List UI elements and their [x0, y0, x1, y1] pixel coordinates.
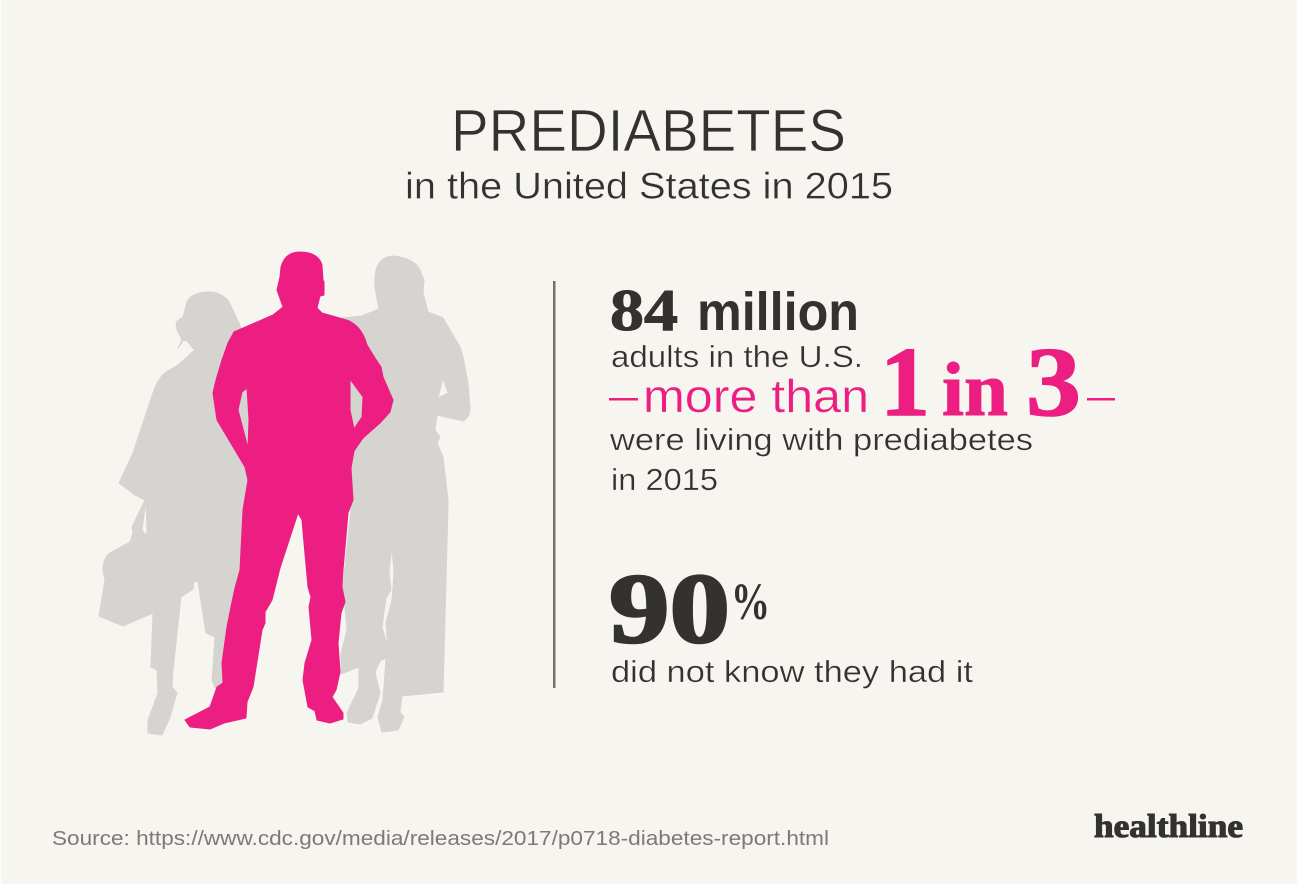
big number: 84 million	[610, 277, 859, 343]
title	[405, 98, 893, 206]
silhouette: woman on right	[335, 256, 470, 732]
text: were living with prediabetes in 2015	[609, 422, 1033, 497]
stat block: 90 percent	[609, 553, 973, 689]
source note: Source: https://www.cdc.gov/media/releases/2017/p0718-diabetes-report.html	[52, 827, 829, 850]
highlight: more than 1 in 3: more than	[643, 370, 869, 422]
big number: 84 million: million	[697, 282, 859, 342]
text: did not know they had it: did not know they had it	[611, 654, 973, 689]
highlight: more than 1 in 3: 3	[1026, 328, 1081, 437]
illustration: three people silhouettes	[99, 252, 470, 735]
text: were living with prediabetes in 2015: in 2015	[611, 462, 718, 497]
vertical divider line	[553, 281, 556, 688]
text: adults in the U.S.: adults in the U.S.	[611, 339, 863, 374]
big number: 90%	[609, 553, 770, 664]
highlight: more than 1 in 3: in	[942, 348, 1008, 432]
title: PREDIABETES	[451, 98, 846, 164]
big number: 90%: 90	[609, 553, 730, 664]
big number: 84 million: 84	[610, 277, 678, 343]
subtitle: in the United States in 2015	[405, 166, 893, 206]
logo: healthline: healthline	[1094, 809, 1243, 845]
highlight: more than 1 in 3	[609, 328, 1115, 437]
highlight: more than 1 in 3: 1	[880, 328, 930, 437]
big number: 90%: %	[731, 574, 770, 631]
silhouette: man in pink	[185, 252, 393, 729]
text: were living with prediabetes in 2015: were living with prediabetes	[609, 422, 1033, 457]
stat block: 84 million	[609, 277, 1115, 497]
silhouette: woman on left with bag	[99, 292, 260, 735]
